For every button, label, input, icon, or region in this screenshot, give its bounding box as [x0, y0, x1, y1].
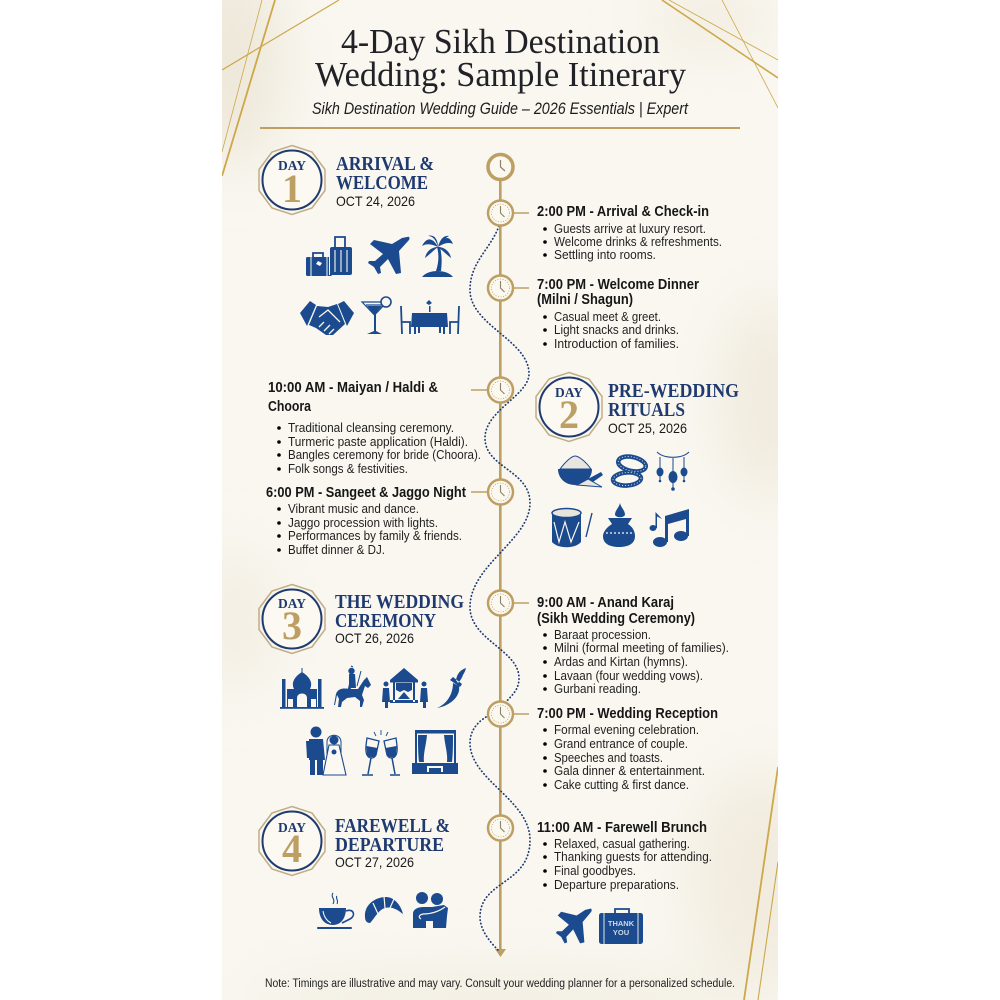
icon: kalash pot: [603, 503, 635, 547]
day 4 badge: DAY: [278, 820, 306, 835]
icon: coffee cup: [317, 893, 353, 929]
clock: 11:00 AM: [488, 816, 513, 840]
icon: dhol drum: [552, 508, 592, 547]
day 2 heading: OCT 25, 2026: [608, 420, 687, 436]
7:00 PM reception block: [537, 706, 718, 792]
11:00 AM schedule block: Relaxed, casual gathering.: [554, 837, 690, 851]
day 4 badge: 4: [282, 826, 302, 871]
gold corner lines: [222, 0, 778, 1000]
day 3 badge: 3: [282, 603, 302, 648]
day 2 heading: RITUALS: [608, 399, 685, 421]
9:00 AM schedule block: Baraat procession.: [554, 628, 651, 642]
day 4 heading: FAREWELL &: [335, 815, 450, 837]
9:00 AM schedule block: 9:00 AM - Anand Karaj: [537, 595, 674, 611]
9:00 AM schedule block: Milni (formal meeting of families).: [554, 641, 729, 655]
clock and connector: 2:00 PM: [488, 200, 529, 226]
day 3 heading: [335, 591, 464, 646]
clock and connector: 9:00 AM: [488, 590, 529, 616]
day 1 badge: 1: [282, 166, 302, 211]
11:00 AM schedule block: [537, 820, 712, 892]
day 3 badge: DAY: [278, 596, 306, 611]
11:00 AM schedule block: Thanking guests for attending.: [554, 850, 712, 864]
icon: turmeric bowl: [558, 456, 603, 487]
clock and connector: 7:00 PM welcome: [488, 276, 529, 300]
9:00 AM schedule block: Ardas and Kirtan (hymns).: [554, 655, 688, 669]
icon: groom on horse: [334, 666, 371, 707]
day 3 heading: OCT 26, 2026: [335, 630, 414, 646]
6:00 PM schedule block: Jaggo procession with lights.: [288, 516, 438, 530]
10:00 AM schedule block: Turmeric paste application (Haldi).: [288, 435, 468, 449]
11:00 AM schedule block: Final goodbyes.: [554, 864, 636, 878]
clock and connector: 6:00 PM: [471, 480, 513, 504]
9:00 AM schedule block: Gurbani reading.: [554, 682, 641, 696]
clock and connector: 7:00 PM reception: [488, 702, 529, 726]
10:00 AM schedule block: Bangles ceremony for bride (Choora).: [288, 448, 481, 462]
7:00 PM reception block: Cake cutting & first dance.: [554, 778, 689, 792]
day 3 heading: CEREMONY: [335, 610, 436, 632]
icon: palm tree: [422, 235, 453, 277]
icon: luggage: [306, 237, 352, 276]
clock: top marker: [488, 154, 513, 180]
icon: reception stage: [412, 730, 458, 774]
6:00 PM schedule block: 6:00 PM - Sangeet & Jaggo Night: [266, 485, 466, 501]
7:00 PM reception block: Formal evening celebration.: [554, 723, 699, 737]
icon: gurdwara: [280, 668, 324, 709]
day 2 heading: PRE-WEDDING: [608, 380, 739, 402]
day 4 badge: [259, 806, 325, 876]
7:00 PM welcome dinner block: Introduction of families.: [554, 337, 679, 351]
11:00 AM schedule block: 11:00 AM - Farewell Brunch: [537, 820, 707, 836]
icon: handshake: [300, 301, 354, 335]
2:00 PM schedule block: Guests arrive at luxury resort.: [554, 222, 706, 236]
title rule: [260, 127, 740, 129]
icon: bangles: [613, 454, 647, 486]
day 2 badge: [536, 372, 602, 442]
icon: music notes: [650, 509, 689, 547]
11:00 AM schedule block: Departure preparations.: [554, 878, 679, 892]
7:00 PM welcome dinner block: Casual meet & greet.: [554, 310, 661, 324]
dotted route: [470, 226, 530, 950]
day 1 heading: OCT 24, 2026: [336, 193, 415, 209]
icon: croissant: [365, 896, 403, 923]
10:00 AM schedule block: Folk songs & festivities.: [288, 462, 408, 476]
day 3 badge: [259, 584, 325, 654]
subtitle: Sikh Destination Wedding Guide – 2026 Essentials | Expert: [312, 100, 689, 118]
7:00 PM reception block: 7:00 PM - Wedding Reception: [537, 706, 718, 722]
clock and connector: 10:00 AM: [471, 378, 513, 402]
day 3 heading: THE WEDDING: [335, 591, 464, 613]
icon: embracing couple: [413, 892, 448, 928]
icon: departing airplane: [556, 909, 592, 943]
day 2 badge: 2: [559, 392, 579, 437]
icon: thank you suitcase: THANK: [608, 919, 635, 928]
day 4 heading: DEPARTURE: [335, 834, 444, 856]
day 1 badge: DAY: [278, 158, 306, 173]
day 2 heading: [608, 380, 739, 436]
2:00 PM schedule block: Welcome drinks & refreshments.: [554, 235, 722, 249]
10:00 AM schedule block: 10:00 AM - Maiyan / Haldi &: [268, 380, 438, 396]
2:00 PM schedule block: 2:00 PM - Arrival & Check-in: [537, 204, 709, 220]
icon: airplane: [368, 237, 409, 274]
day 1 heading: ARRIVAL &: [336, 153, 434, 175]
icon: dining table: [401, 300, 459, 334]
6:00 PM schedule block: Performances by family & friends.: [288, 529, 462, 543]
day 4 heading: OCT 27, 2026: [335, 854, 414, 870]
9:00 AM schedule block: [537, 595, 729, 696]
day 1 heading: WELCOME: [336, 172, 428, 194]
icon: martini glass: [362, 297, 391, 334]
7:00 PM welcome dinner block: (Milni / Shagun): [537, 292, 633, 308]
icon: bride and groom: [306, 726, 346, 775]
icon: champagne toast: [362, 730, 400, 775]
7:00 PM reception block: Speeches and toasts.: [554, 751, 663, 765]
7:00 PM welcome dinner block: [537, 277, 699, 351]
7:00 PM reception block: Grand entrance of couple.: [554, 737, 688, 751]
title: Wedding: Sample Itinerary: [315, 55, 686, 94]
2:00 PM schedule block: Settling into rooms.: [554, 248, 656, 262]
9:00 AM schedule block: (Sikh Wedding Ceremony): [537, 611, 695, 627]
icon: hanging earrings: [656, 452, 689, 491]
timeline spine: [495, 167, 506, 957]
icon: thank you suitcase: YOU: [613, 928, 629, 937]
6:00 PM schedule block: Buffet dinner & DJ.: [288, 543, 385, 557]
icon: thank you suitcase: [599, 909, 643, 944]
title: [315, 22, 686, 94]
7:00 PM welcome dinner block: 7:00 PM - Welcome Dinner: [537, 277, 699, 293]
day 2 badge: DAY: [555, 385, 583, 400]
background panel: [222, 0, 778, 1000]
day 4 heading: [335, 815, 450, 870]
6:00 PM schedule block: [266, 485, 466, 557]
footnote: Note: Timings are illustrative and may vary. Consult your wedding planner for a personalized schedule.: [265, 978, 735, 990]
day 1 badge: [259, 146, 325, 214]
10:00 AM schedule block: Choora: [268, 399, 312, 415]
6:00 PM schedule block: Vibrant music and dance.: [288, 502, 419, 516]
9:00 AM schedule block: Lavaan (four wedding vows).: [554, 669, 703, 683]
icon: kirpan sword: [437, 668, 466, 708]
title: 4-Day Sikh Destination: [341, 22, 660, 61]
7:00 PM reception block: Gala dinner & entertainment.: [554, 764, 705, 778]
day 1 heading: [336, 153, 434, 209]
7:00 PM welcome dinner block: Light snacks and drinks.: [554, 323, 679, 337]
2:00 PM schedule block: [537, 204, 722, 262]
10:00 AM schedule block: Traditional cleansing ceremony.: [288, 421, 454, 435]
10:00 AM schedule block: [268, 380, 481, 476]
icon: wedding mandap: [382, 668, 428, 708]
